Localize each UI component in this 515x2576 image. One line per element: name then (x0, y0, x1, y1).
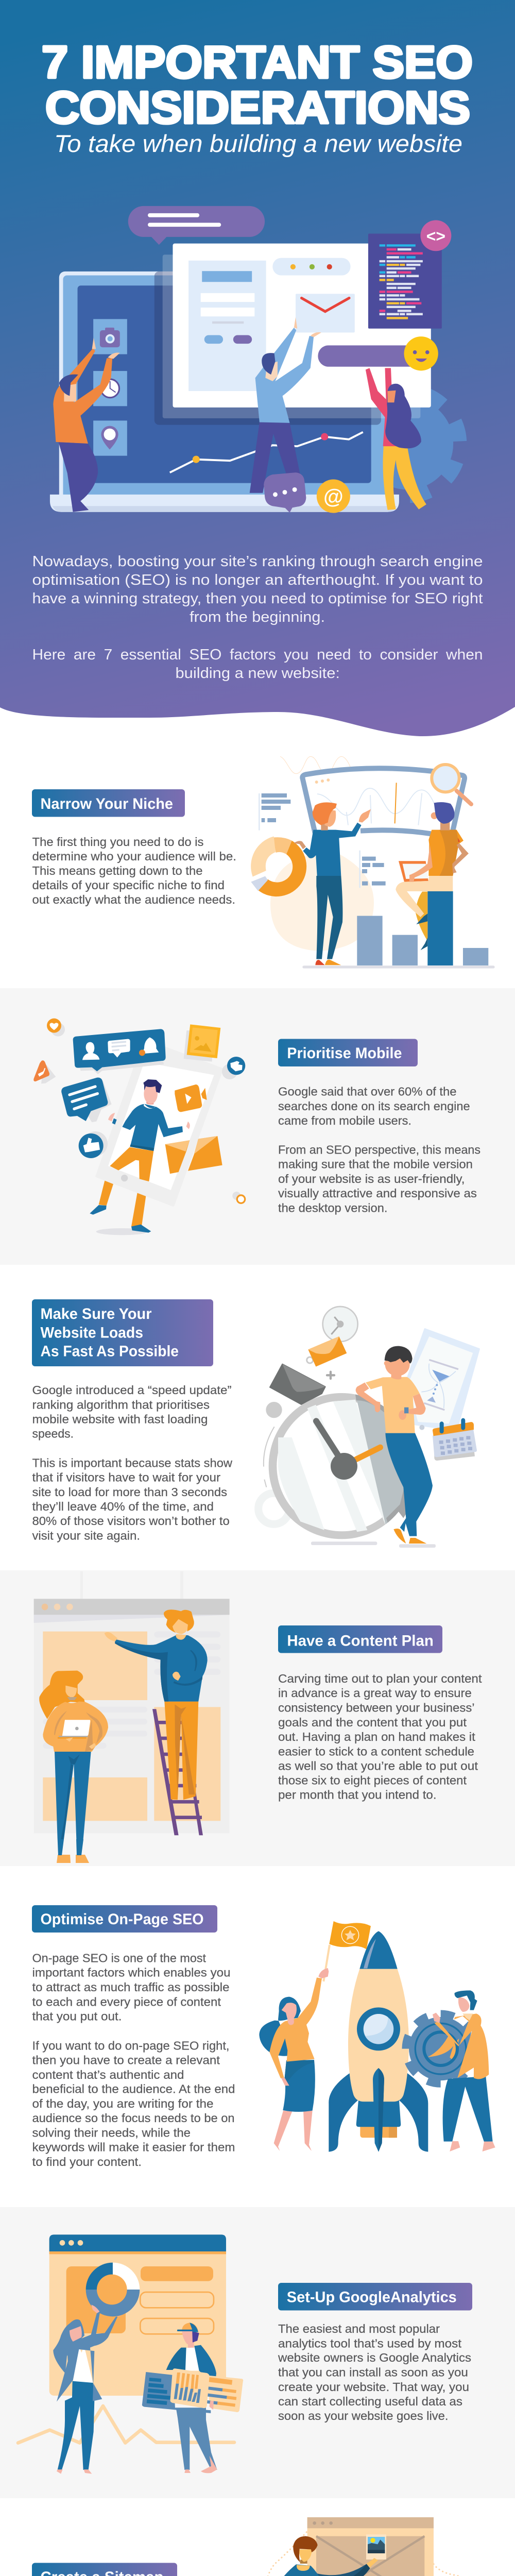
body text: then you have to create a relevant (32, 2054, 220, 2067)
body text: searches done on its search engine (278, 1099, 470, 1113)
body text: the desktop version. (278, 1201, 387, 1215)
intro text: from the beginning. (190, 609, 325, 625)
intro text: Here are 7 essential SEO factors you need to consider when (32, 647, 483, 663)
body text: they’ll leave 40% of the time, and (32, 1500, 214, 1513)
title: 7 IMPORTANT SEO (42, 37, 473, 88)
body text: Google said that over 60% of the (278, 1085, 456, 1098)
heading badge: Narrow Your Niche (40, 795, 173, 812)
heading badge: As Fast As Possible (40, 1343, 179, 1360)
body text: to find your content. (32, 2155, 142, 2168)
body text: website owners is Google Analytics (278, 2351, 471, 2364)
body text: Google introduced a “speed update” (32, 1383, 231, 1397)
heading badge (32, 789, 185, 817)
illustration: analytics dashboard (18, 2234, 243, 2474)
line chart (170, 432, 363, 472)
body text: site to load for more than 3 seconds (32, 1485, 227, 1499)
intro text: optimisation (SEO) is no longer an afterthought. If you want to (32, 572, 483, 588)
body text: Carving time out to plan your content (278, 1672, 482, 1685)
body text: making sure that the mobile version (278, 1157, 473, 1171)
panel: on-page SEO (32, 1905, 495, 2168)
heading badge: Set-Up GoogleAnalytics (287, 2289, 457, 2306)
body text (32, 835, 236, 906)
heading badge: Website Loads (40, 1325, 143, 1342)
illustration: sitemap wireframe (266, 2517, 480, 2576)
body text: visually attractive and responsive as (278, 1187, 477, 1200)
speech bubble (128, 206, 265, 245)
panel: content plan (34, 1571, 482, 1863)
body text: analytics tool that’s used by most (278, 2337, 462, 2350)
body text (278, 1672, 482, 1802)
body text: beneficial to the audience. At the end (32, 2082, 235, 2095)
intro text (32, 553, 483, 682)
woman's legs and feet (57, 1839, 89, 1863)
section backgrounds (0, 988, 515, 2498)
body text: speeds. (32, 1427, 74, 1440)
at sign icon: @ (323, 485, 344, 508)
body text: If you want to do on-page SEO right, (32, 2039, 229, 2052)
body text: can start collecting useful data as (278, 2395, 462, 2408)
body text: create your website. That way, you (278, 2380, 469, 2394)
panel: google analytics (18, 2234, 472, 2474)
body text: out. Having a plan on hand makes it (278, 1730, 475, 1743)
body text: came from mobile users. (278, 1114, 411, 1127)
heading badge (32, 1299, 213, 1366)
body text: details of your specific niche to find (32, 878, 225, 892)
body text: to each and every piece of content (32, 1995, 221, 2008)
code panel (368, 220, 451, 329)
body text: out exactly what the audience needs. (32, 893, 235, 906)
heading badge: Prioritise Mobile (287, 1045, 402, 1062)
laptop (50, 272, 399, 512)
browser window (154, 244, 431, 425)
body text: solving their needs, while the (32, 2126, 191, 2139)
body text: visit your site again. (32, 1529, 140, 1542)
body text: keywords will make it easier for them (32, 2141, 235, 2154)
intro text: Nowadays, boosting your site’s ranking through search engine (32, 553, 483, 570)
body text: ranking algorithm that prioritises (32, 1398, 210, 1412)
heading badge (278, 1039, 418, 1066)
body text: The first thing you need to do is (32, 835, 204, 849)
body text: audience so the focus needs to be on (32, 2111, 235, 2125)
body text: per month that you intend to. (278, 1788, 437, 1802)
code panel: <> (426, 227, 445, 245)
icon: gear (340, 376, 475, 511)
subtitle: To take when building a new website (54, 130, 462, 157)
body text: mobile website with fast loading (32, 1413, 208, 1426)
icon: envelope (296, 294, 355, 332)
body text: of the day, you are writing for the (32, 2097, 213, 2110)
body text: consistency between your business’ (278, 1701, 475, 1714)
heading badge (32, 1905, 217, 1933)
heading badge (32, 2563, 177, 2576)
body text: This means getting down to the (32, 864, 203, 877)
body text: On-page SEO is one of the most (32, 1951, 207, 1964)
chat bubble icon (264, 472, 306, 513)
panel: sitemap (32, 2517, 480, 2576)
body text: of your website is as user-friendly, (278, 1172, 465, 1185)
body text (32, 1951, 235, 2168)
body text: as well so that you’re able to put out (278, 1759, 478, 1773)
body text: goals and the content that you put (278, 1716, 467, 1729)
search pill with smiley (318, 336, 438, 370)
body text (278, 1085, 480, 1215)
illustration: rocket team (259, 1921, 495, 2152)
heading badge (278, 1625, 442, 1653)
app icons (93, 319, 127, 456)
illustration: analysts with charts (251, 756, 495, 969)
heading badge: Make Sure Your (40, 1306, 152, 1323)
panel: narrow your niche (32, 756, 495, 969)
illustration: man in phone (33, 1019, 245, 1235)
panel: loading speed (32, 1299, 479, 1548)
title (42, 37, 473, 133)
body text: those six to eight pieces of content (278, 1773, 467, 1787)
intro text: have a winning strategy, then you need to optimise for SEO right (32, 590, 483, 607)
person: blue (250, 317, 321, 493)
intro text: building a new website: (175, 665, 340, 682)
body text (32, 1383, 232, 1542)
body text: in advance is a great way to ensure (278, 1686, 472, 1700)
body text: to attract as much traffic as possible (32, 1980, 230, 1994)
body text: that you put out. (32, 2010, 122, 2023)
body text: important factors which enables you (32, 1966, 231, 1979)
title: CONSIDERATIONS (45, 82, 470, 133)
heading badge: Optimise On-Page SEO (40, 1911, 204, 1928)
hero illustration (50, 206, 475, 513)
body text: determine who your audience will be. (32, 850, 236, 863)
illustration: content planning board (34, 1571, 230, 1839)
body text: easier to stick to a content schedule (278, 1744, 474, 1758)
body text: The easiest and most popular (278, 2322, 440, 2335)
heading badge (278, 2283, 472, 2310)
heading badge: Have a Content Plan (287, 1633, 434, 1650)
body text: 80% of those visitors won’t bother to (32, 1514, 230, 1528)
body text: content that’s authentic and (32, 2068, 184, 2081)
body text: soon as your website goes live. (278, 2409, 448, 2422)
person: woman (366, 368, 426, 510)
body text: that if visitors have to wait for your (32, 1470, 220, 1484)
body text: that you can install as soon as you (278, 2366, 468, 2379)
panel: hero background (0, 0, 515, 736)
panel: prioritise mobile (33, 1019, 480, 1235)
person: orange (53, 338, 120, 512)
at sign icon (317, 480, 350, 513)
illustration: stopwatch and man (259, 1307, 479, 1548)
body text (278, 2322, 471, 2422)
body text: This is important because stats show (32, 1456, 232, 1470)
body text: From an SEO perspective, this means (278, 1143, 480, 1157)
